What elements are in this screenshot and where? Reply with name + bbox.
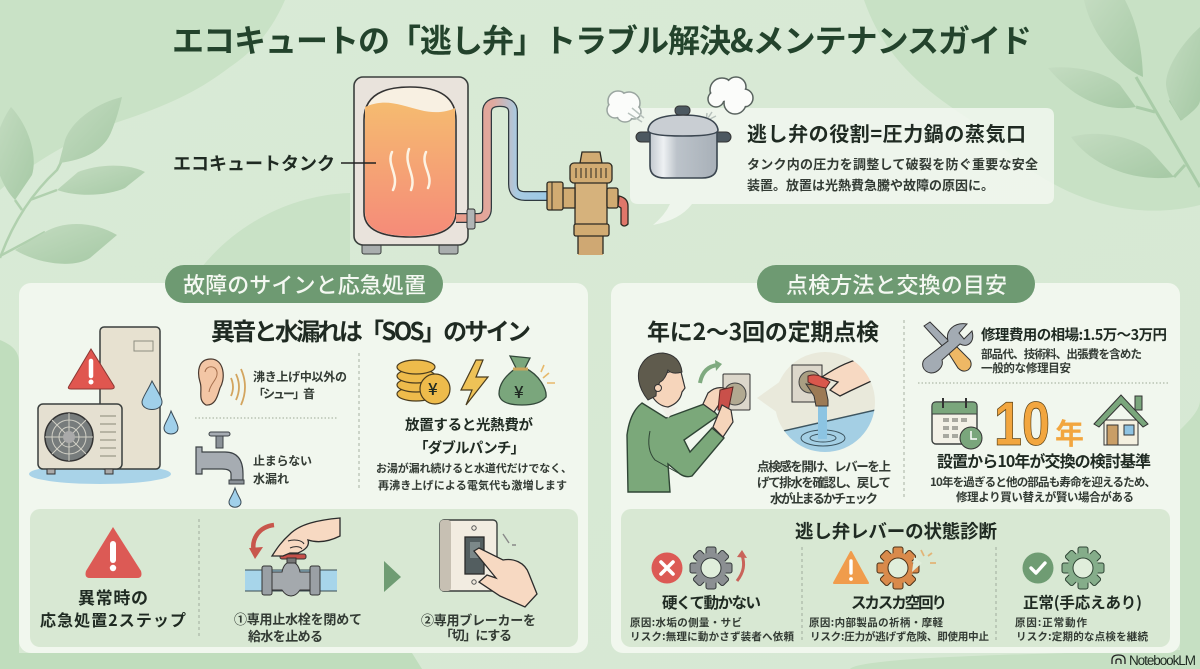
text: double punch explanation bbox=[376, 460, 572, 493]
pipe bbox=[456, 102, 550, 229]
box: lever diagnosis bbox=[621, 509, 1170, 647]
state: loose lever: 原因:内部製品の祈柄・摩軽 bbox=[809, 615, 944, 630]
description bbox=[747, 154, 1038, 194]
state: stiff lever: 原因:水垢の側量・サビ bbox=[630, 615, 742, 630]
icon: coins, lightning and money bag: ¥ bbox=[428, 375, 438, 400]
text: double punch explanation: お湯が漏れ続けると水道代だけでなく、 bbox=[376, 460, 572, 476]
text: double punch: 放置すると光熱費が bbox=[405, 414, 534, 435]
section pill bbox=[757, 265, 1035, 303]
diagram: EcoCute tank with pipe and valve bbox=[173, 77, 628, 255]
watermark: NotebookLM: NotebookLM bbox=[1129, 653, 1196, 668]
icon: dripping faucet bbox=[196, 432, 244, 507]
text: double punch bbox=[405, 414, 534, 458]
text: step 1 bbox=[234, 609, 362, 645]
text: step 2: ②専用ブレーカーを bbox=[421, 610, 536, 629]
illustration: man operating lever bbox=[627, 353, 750, 492]
icon: wrench and screwdriver bbox=[923, 322, 973, 373]
state: loose lever: リスク:圧力が逃げず危険、即使用中止 bbox=[810, 629, 990, 644]
panel: inspection method and replacement guide bbox=[611, 265, 1180, 653]
text: repair cost: 部品代、技術料、出張費を含めた bbox=[981, 346, 1142, 362]
heading: 異音と水漏れは「SOS」のサイン bbox=[211, 312, 531, 347]
text: replacement guide bbox=[930, 448, 1156, 505]
illustration: draining valve closeup bbox=[758, 352, 875, 452]
text: inspection steps: 水が止まるかチェック bbox=[770, 488, 878, 507]
text: double punch: 「ダブルパンチ」 bbox=[414, 437, 525, 458]
state: stiff lever: 硬くて動かない bbox=[662, 591, 761, 613]
heading: 年に2〜3回の定期点検 bbox=[647, 313, 879, 347]
state: normal bbox=[1015, 547, 1148, 644]
text: repair cost bbox=[981, 324, 1167, 376]
left leaves decoration bbox=[0, 97, 145, 264]
state: normal: 正常(手応えあり) bbox=[1023, 591, 1142, 613]
state: stiff lever: リスク:無理に動かさず装者へ依頼 bbox=[630, 629, 794, 644]
text: abnormal sound bbox=[253, 368, 347, 402]
text: double punch explanation: 再沸き上げによる電気代も激増します bbox=[378, 477, 567, 493]
right leaves decoration bbox=[1048, 0, 1200, 187]
heading: 逃し弁の役割=圧力鍋の蒸気口 bbox=[747, 118, 1026, 147]
icon: EcoCute units with warning bbox=[29, 327, 178, 484]
icon: warning triangle bbox=[86, 527, 142, 578]
text: replacement guide: 10年を過ぎると他の部品も寿命を迎えるため、 bbox=[930, 474, 1156, 490]
text: repair cost: 修理費用の相場:1.5万〜3万円 bbox=[981, 324, 1167, 345]
text: inspection steps: 点検感を開け、レバーを上 bbox=[757, 456, 891, 475]
section pill: 故障のサインと応急処置 bbox=[183, 268, 426, 300]
text: step 2 bbox=[421, 610, 536, 644]
text: emergency steps label: 応急処置2ステップ bbox=[40, 607, 186, 631]
icon: tank bbox=[354, 77, 468, 254]
icon: breaker switch with finger bbox=[440, 520, 537, 607]
figure: 10 years: 10 bbox=[994, 390, 1050, 459]
icon: relief valve bbox=[547, 152, 628, 255]
figure: 10 years: 年 bbox=[1055, 411, 1084, 453]
text: inspection steps bbox=[757, 456, 891, 507]
state: normal: 原因:正常動作 bbox=[1015, 615, 1088, 630]
icon: coins, lightning and money bag bbox=[397, 356, 555, 405]
state: loose lever: スカスカ空回り bbox=[851, 591, 947, 613]
heading: 逃し弁レバーの状態診断 bbox=[795, 518, 997, 544]
text: repair cost: 一般的な修理目安 bbox=[981, 360, 1071, 376]
text: step 1: 給水を止める bbox=[248, 626, 323, 645]
panel: failure signs and emergency response bbox=[19, 265, 588, 653]
text: abnormal sound: 沸き上げ中以外の bbox=[253, 368, 347, 385]
description: 装置。放置は光熱費急騰や故障の原因に。 bbox=[747, 175, 994, 194]
icon: house bbox=[1094, 395, 1148, 445]
text: replacement guide: 設置から10年が交換の検討基準 bbox=[937, 448, 1151, 472]
state: stiff lever bbox=[630, 547, 794, 644]
icon: ear with sound bbox=[199, 359, 245, 405]
text: water leak bbox=[253, 452, 312, 487]
description: タンク内の圧力を調整して破裂を防ぐ重要な安全 bbox=[747, 154, 1038, 173]
label: tank: エコキュートタンク bbox=[173, 150, 335, 176]
text: abnormal sound: 「シュー」音 bbox=[253, 385, 315, 402]
icon: coins, lightning and money bag: ¥ bbox=[514, 378, 524, 403]
text: replacement guide: 修理より買い替えが賢い場合がある bbox=[956, 489, 1134, 505]
text: step 2: 「切」にする bbox=[440, 625, 512, 644]
state: loose lever bbox=[809, 547, 990, 644]
text: emergency steps label bbox=[40, 584, 186, 631]
icon: calendar and clock bbox=[932, 398, 982, 449]
text: step 1: ①専用止水栓を閉めて bbox=[234, 609, 362, 628]
section pill: 点検方法と交換の目安 bbox=[786, 268, 1007, 300]
box: two emergency steps bbox=[30, 509, 578, 647]
text: emergency steps label: 異常時の bbox=[78, 584, 148, 609]
text: water leak: 止まらない bbox=[253, 452, 312, 469]
arrow: next step bbox=[384, 561, 401, 592]
speech bubble: role of relief valve bbox=[607, 77, 1054, 225]
text: water leak: 水漏れ bbox=[253, 470, 289, 487]
icon: pressure pot bbox=[607, 77, 753, 178]
title: エコキュートの「逃し弁」トラブル解決&メンテナンスガイド bbox=[172, 16, 1032, 62]
state: normal: リスク:定期的な点検を継続 bbox=[1016, 629, 1148, 644]
text: inspection steps: げて排水を確認し、戻して bbox=[757, 472, 891, 491]
icon: stop valve with hand bbox=[245, 518, 340, 596]
